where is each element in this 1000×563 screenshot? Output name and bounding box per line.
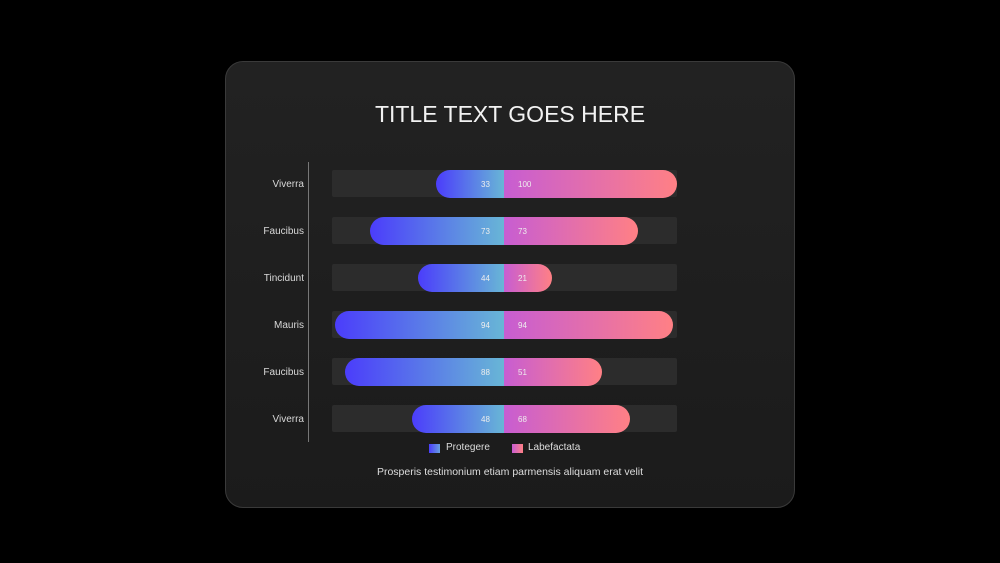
row: Viverra [272, 170, 677, 198]
chart: 21 [518, 274, 527, 283]
row: Tincidunt [264, 264, 677, 292]
chart: 33 [481, 180, 490, 189]
legend [429, 442, 580, 453]
chart: Viverra [272, 414, 304, 425]
row: Viverra 2 [272, 405, 677, 433]
chart: 88 [481, 368, 490, 377]
chart: 100 [518, 180, 531, 189]
row: Mauris [274, 311, 677, 339]
legend: Labefactata [528, 442, 580, 453]
chart: 94 [481, 321, 490, 330]
legend: Protegere [446, 442, 490, 453]
chart: 68 [518, 415, 527, 424]
chart: Faucibus [263, 226, 304, 237]
chart: 73 [481, 227, 490, 236]
chart: 44 [481, 274, 490, 283]
chart: 73 [518, 227, 527, 236]
chart: Tincidunt [264, 273, 304, 284]
title: TITLE TEXT GOES HERE [375, 101, 645, 127]
row: Faucibus [263, 217, 677, 245]
axis line [308, 162, 309, 442]
chart: 48 [481, 415, 490, 424]
chart: 94 [518, 321, 527, 330]
chart: Faucibus [263, 367, 304, 378]
row: Faucibus 2 [263, 358, 677, 386]
caption: Prosperis testimonium etiam parmensis aliquam erat velit [377, 466, 643, 478]
chart: Mauris [274, 320, 304, 331]
chart: 51 [518, 368, 527, 377]
panel [225, 61, 795, 508]
chart: Viverra [272, 179, 304, 190]
